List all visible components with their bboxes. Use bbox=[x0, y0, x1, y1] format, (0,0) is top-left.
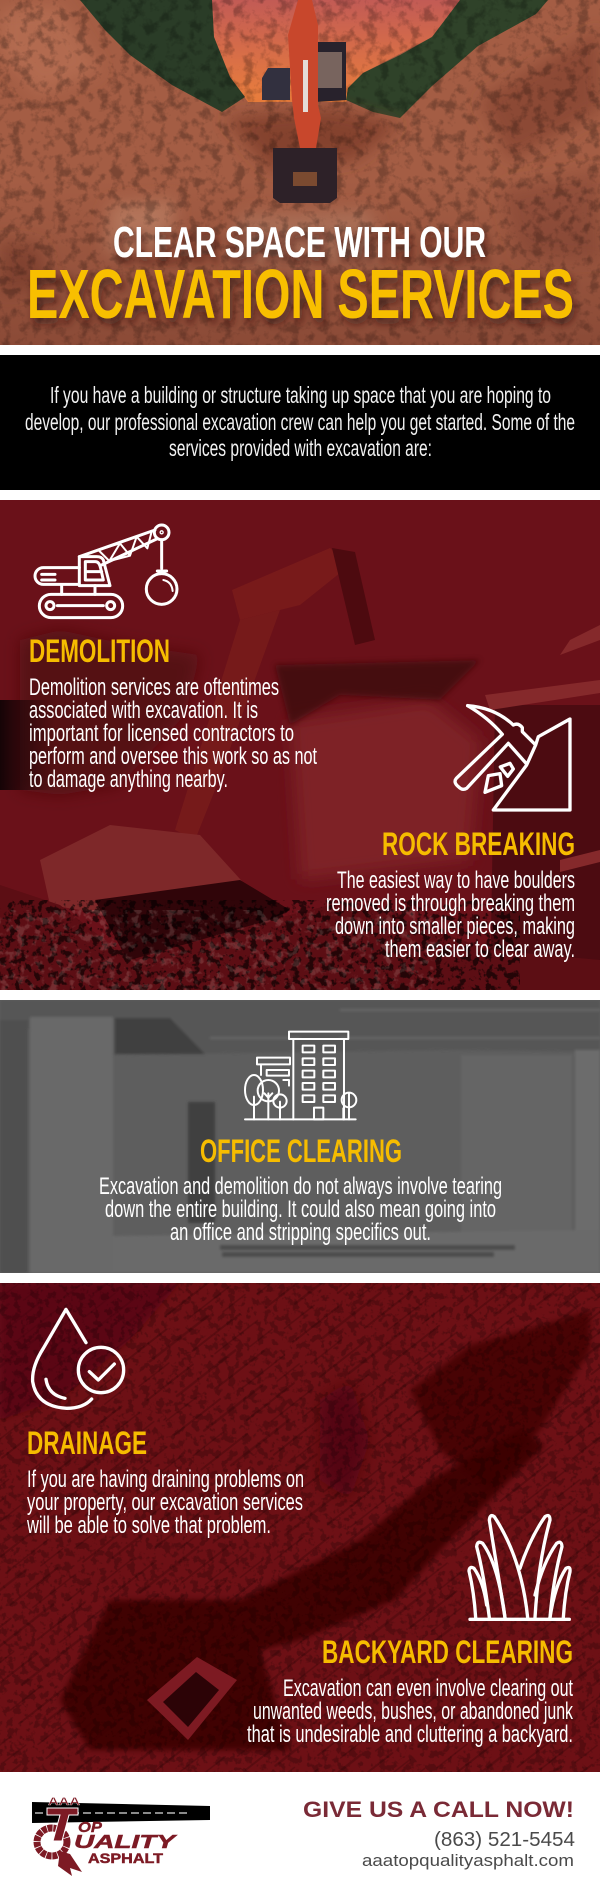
text: drainage description: your property, our excavation services bbox=[27, 1489, 303, 1516]
heading: drainage: DRAINAGE bbox=[27, 1425, 147, 1461]
rubble pile bbox=[0, 885, 600, 990]
shaded dirt patches bbox=[0, 5, 600, 295]
arm piston bbox=[303, 60, 308, 112]
far right column bbox=[575, 1050, 600, 1240]
cab window bbox=[318, 52, 342, 88]
text: demolition description: important for licensed contractors to bbox=[29, 720, 294, 747]
text: drainage description: will be able to solve that problem. bbox=[26, 1512, 271, 1539]
wrecking excavator bbox=[40, 825, 290, 965]
panel: office clearing bbox=[0, 1000, 600, 1273]
panel: demolition and rock breaking bbox=[0, 500, 600, 990]
panel: introduction bbox=[0, 355, 600, 490]
panel: drainage and backyard clearing bbox=[0, 1283, 600, 1772]
office wall bbox=[0, 1000, 600, 1273]
text: drainage description bbox=[26, 1466, 304, 1539]
heading: demolition: DEMOLITION bbox=[29, 633, 170, 669]
diagonal streak texture bbox=[0, 1283, 600, 1772]
rear counterweight bbox=[262, 68, 290, 100]
icon: pickaxe and rock bbox=[455, 706, 570, 810]
demolition photo tint bbox=[0, 500, 600, 990]
rubble texture bbox=[0, 900, 520, 990]
text: demolition description: to damage anything nearby. bbox=[29, 766, 228, 793]
text: rock breaking description bbox=[326, 867, 575, 963]
concrete pit bbox=[147, 1657, 237, 1740]
office photo shapes bbox=[0, 1000, 600, 1273]
logo T crossbar and stem bbox=[47, 1808, 78, 1841]
upper boom bbox=[232, 548, 338, 620]
excavator body bbox=[40, 825, 242, 914]
floor bbox=[113, 1230, 600, 1273]
heading: office clearing: OFFICE CLEARING bbox=[200, 1133, 402, 1169]
title shade bbox=[0, 223, 600, 345]
intro text: services provided with excavation are: bbox=[169, 435, 432, 461]
title bbox=[27, 218, 574, 333]
right trees bbox=[346, 0, 548, 118]
stick bbox=[332, 548, 375, 645]
text: office clearing description: an office and stripping specifics out. bbox=[170, 1219, 431, 1246]
bucket reflection bbox=[293, 172, 317, 186]
text: demolition description: perform and oversee this work so as not bbox=[29, 743, 317, 770]
excavator arm bbox=[288, 0, 321, 148]
excavator tracks bbox=[95, 880, 290, 965]
excavator from above bbox=[410, 1310, 590, 1490]
lumber on floor bbox=[220, 1245, 515, 1257]
website: aaatopqualityasphalt.com bbox=[362, 1851, 574, 1870]
logo: AAA Top Quality Asphalt bbox=[32, 1796, 210, 1876]
dark left fade bbox=[0, 700, 48, 790]
footer bbox=[32, 1796, 575, 1876]
dark mound centre bbox=[320, 1380, 370, 1500]
icon: office building with trees bbox=[245, 1032, 356, 1119]
icon: grass bbox=[469, 1516, 570, 1619]
logo road dashes bbox=[35, 1812, 190, 1814]
logo OP: OP bbox=[78, 1819, 103, 1836]
ceiling bbox=[0, 1000, 600, 1055]
call to action heading: GIVE US A CALL NOW! bbox=[303, 1797, 574, 1822]
brick building right bbox=[490, 705, 600, 960]
intro background bbox=[0, 355, 600, 490]
drainage photo tint bbox=[0, 1283, 600, 1772]
logo Q ring bbox=[37, 1828, 67, 1856]
text: demolition description bbox=[29, 674, 317, 793]
left pillar bbox=[30, 1017, 113, 1273]
icon: crane with wrecking ball bbox=[35, 525, 177, 618]
lower boom bbox=[175, 610, 280, 840]
text: drainage description: If you are having draining problems on bbox=[27, 1466, 304, 1493]
logo road bar bbox=[32, 1802, 210, 1823]
intro text bbox=[25, 382, 575, 461]
excavator cab bbox=[318, 42, 346, 102]
text: backyard clearing description bbox=[247, 1675, 574, 1748]
dirt texture bbox=[0, 0, 600, 345]
right wall panels bbox=[461, 1055, 572, 1235]
building ledges bbox=[485, 625, 600, 872]
pit outer bbox=[147, 1657, 237, 1740]
logo AAA: AAA bbox=[48, 1796, 80, 1808]
fine grain texture bbox=[0, 1283, 600, 1772]
far left dark bbox=[0, 1020, 28, 1273]
left trees bbox=[80, 0, 245, 112]
excavator machine bbox=[262, 0, 346, 203]
top left mound shade bbox=[0, 1283, 180, 1420]
base dirt bbox=[0, 0, 600, 345]
excavator bucket bbox=[273, 148, 337, 203]
debris board bbox=[188, 1102, 215, 1223]
demolition arm bbox=[175, 548, 375, 840]
logo UALITY: UALITY bbox=[74, 1832, 178, 1852]
icon: water drop with check mark bbox=[33, 1309, 124, 1408]
distant trees bbox=[20, 630, 200, 795]
phone number: (863) 521-5454 bbox=[434, 1829, 575, 1851]
logo ASPHALT: ASPHALT bbox=[88, 1850, 164, 1866]
dust behind building bbox=[290, 700, 480, 880]
ceiling opening bbox=[115, 1018, 205, 1054]
ceiling light stripes bbox=[210, 1010, 600, 1038]
text: demolition description: associated with excavation. It is bbox=[29, 697, 258, 724]
text: office clearing description bbox=[99, 1173, 502, 1246]
text: demolition description: Demolition services are oftentimes bbox=[29, 674, 279, 701]
sunset sky bbox=[210, 0, 465, 102]
dark trench bbox=[60, 1430, 545, 1750]
panel: hero photo of excavator in trench bbox=[0, 0, 600, 345]
rubble highlights bbox=[0, 910, 440, 990]
pit inner bbox=[163, 1672, 219, 1727]
rubble on the roof bbox=[275, 660, 480, 725]
logo Q ribbon bbox=[58, 1851, 82, 1876]
